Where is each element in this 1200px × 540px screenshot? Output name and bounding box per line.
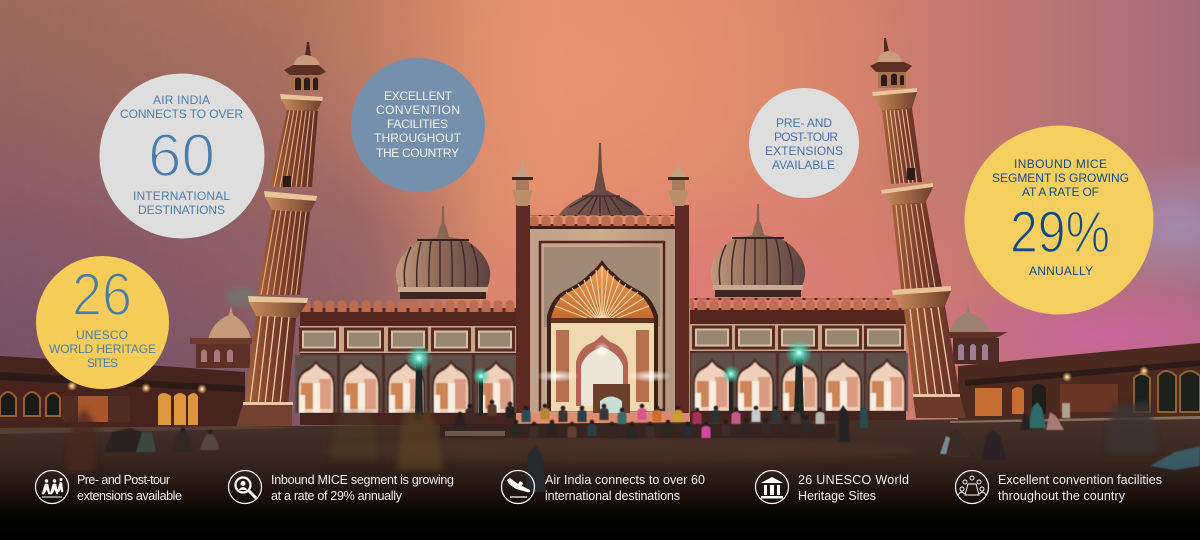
caption text: AVAILABLE [772,158,835,172]
caption text: ANNUALLY [1029,264,1093,278]
caption: throughout the country [998,489,1126,503]
lit arches [691,353,908,411]
heading text: INBOUND MICE [1014,157,1107,171]
caption: Air India connects to over 60 [545,473,705,487]
highlight: MICE growth [228,470,454,504]
caption text [765,116,843,172]
caption text: WORLD HERITAGE [49,342,156,356]
icon: landing plane [502,470,534,504]
lamp posts [405,339,813,420]
small entry gate [593,384,630,413]
caption [271,473,454,503]
caption text: THE COUNTRY [376,146,459,160]
circle: Air India 60 destinations [100,74,264,238]
heading text [120,93,243,121]
wall panels [299,328,515,352]
caption: Inbound MICE segment is growing [271,473,454,487]
seated pair right [940,430,1006,460]
heading text [992,157,1129,199]
highlight: tour extensions [36,470,182,504]
circle: tour extensions [749,88,859,198]
caption text: POST-TOUR [774,130,838,144]
man in the foreground [525,445,546,492]
heading text: AT A RATE OF [1022,185,1099,199]
caption text: SITES [87,356,118,370]
right wing of mosque [690,298,908,423]
circle: 29% growth [964,126,1154,314]
caption text: FACILITIES [387,117,448,131]
left turret [512,158,533,413]
crowd figures [456,400,824,438]
blurred passers-by [66,402,1158,472]
caption [545,473,705,503]
caption text: CONVENTION [376,103,460,117]
icon: meeting table [956,470,988,504]
circle: 26 UNESCO sites [36,256,169,389]
caption [77,473,182,503]
highlight: UNESCO sites [756,470,909,504]
caption text: INTERNATIONAL [133,189,230,203]
standing figures [839,402,1070,442]
heading text: CONNECTS TO OVER [120,107,243,121]
blue cloth [1150,446,1200,470]
heading text: AIR INDIA [153,93,210,107]
caption: international destinations [545,489,680,503]
big number 29%: 29% [1010,200,1110,265]
icon: magnifier with person [228,470,262,504]
icon: classical temple [756,470,788,504]
caption text [374,89,462,160]
side domes [396,204,805,299]
highlight: convention facilities [956,470,1162,504]
big number 26: 26 [72,261,132,328]
left minaret [236,42,326,427]
caption text: UNESCO [76,328,128,342]
left wing of mosque [295,300,517,425]
caption: extensions available [77,489,182,503]
caption [998,473,1162,503]
caption text: THROUGHOUT [374,131,462,145]
caption: Heritage Sites [798,489,876,503]
lit arches [295,355,517,413]
right colonnade and pavilion [948,302,1200,420]
crowd on the steps [66,400,1200,492]
caption text: PRE- AND [776,116,832,130]
bottom strip: five highlights [36,470,1162,504]
central dome [558,143,645,216]
caption text [133,189,230,217]
wall panels [692,326,904,350]
caption [798,473,909,503]
right turret [668,158,689,413]
caption text: EXCELLENT [384,89,453,103]
central iwan gateway [512,158,689,413]
right minaret [870,38,966,418]
caption: 26 UNESCO World [798,473,909,487]
caption text [49,328,156,370]
courtyard ground [0,416,1200,540]
caption: Pre- and Post-tour [77,473,170,487]
caption: Excellent convention facilities [998,473,1162,487]
caption text: DESTINATIONS [138,203,225,217]
left colonnade and pavilion [0,306,252,428]
highlight: destinations [502,470,705,504]
circle: convention facilities [351,58,485,192]
caption text: EXTENSIONS [765,144,843,158]
heading text: SEGMENT IS GROWING [992,171,1129,185]
big number 60: 60 [148,122,215,189]
seated groups left [104,428,219,452]
caption: at a rate of 29% annually [271,489,403,503]
icon: hikers [36,470,68,504]
pointed arch half dome [547,260,658,411]
